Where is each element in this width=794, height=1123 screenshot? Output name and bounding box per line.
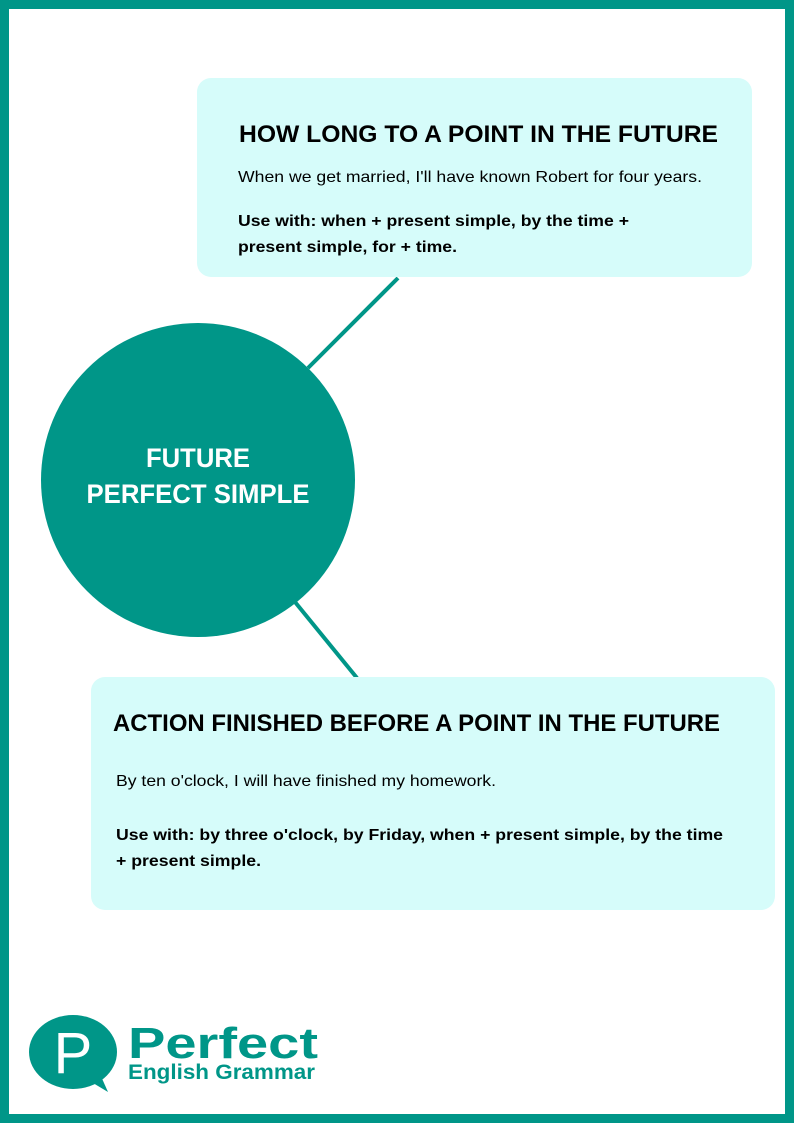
example sentence: top panel: When we get married, I'll have known Robert for four years. bbox=[238, 169, 702, 186]
heading: bottom panel: ACTION FINISHED BEFORE A POINT IN THE FUTURE bbox=[113, 710, 720, 737]
connector line: top bbox=[308, 278, 398, 368]
usage note: bottom panel: + present simple. bbox=[116, 853, 261, 870]
icon: speech bubble P bbox=[29, 1015, 117, 1092]
heading: top panel: HOW LONG TO A POINT IN THE FUTURE bbox=[239, 121, 718, 148]
usage note: top panel: present simple, for + time. bbox=[238, 239, 457, 256]
central circle: future perfect simple: PERFECT SIMPLE bbox=[86, 479, 310, 509]
logo: Perfect English Grammar: English Grammar bbox=[128, 1061, 315, 1084]
central circle: future perfect simple: FUTURE bbox=[146, 443, 250, 473]
usage note: bottom panel: Use with: by three o'clock, by Friday, when + present simple, by the time bbox=[116, 827, 723, 844]
central circle: future perfect simple bbox=[41, 323, 355, 637]
panel: how long to a point in the future bbox=[197, 78, 752, 277]
example sentence: bottom panel: By ten o'clock, I will have finished my homework. bbox=[116, 773, 496, 790]
logo: Perfect English Grammar bbox=[29, 1015, 318, 1092]
usage note: top panel: Use with: when + present simple, by the time + bbox=[238, 213, 629, 230]
icon: speech bubble P: P bbox=[54, 1021, 92, 1086]
connector line: bottom bbox=[295, 602, 357, 678]
usage note: bottom panel bbox=[116, 827, 723, 870]
usage note: top panel bbox=[238, 213, 629, 256]
panel: action finished before a point in the future bbox=[91, 677, 775, 910]
logo: Perfect English Grammar: Perfect bbox=[128, 1019, 318, 1068]
